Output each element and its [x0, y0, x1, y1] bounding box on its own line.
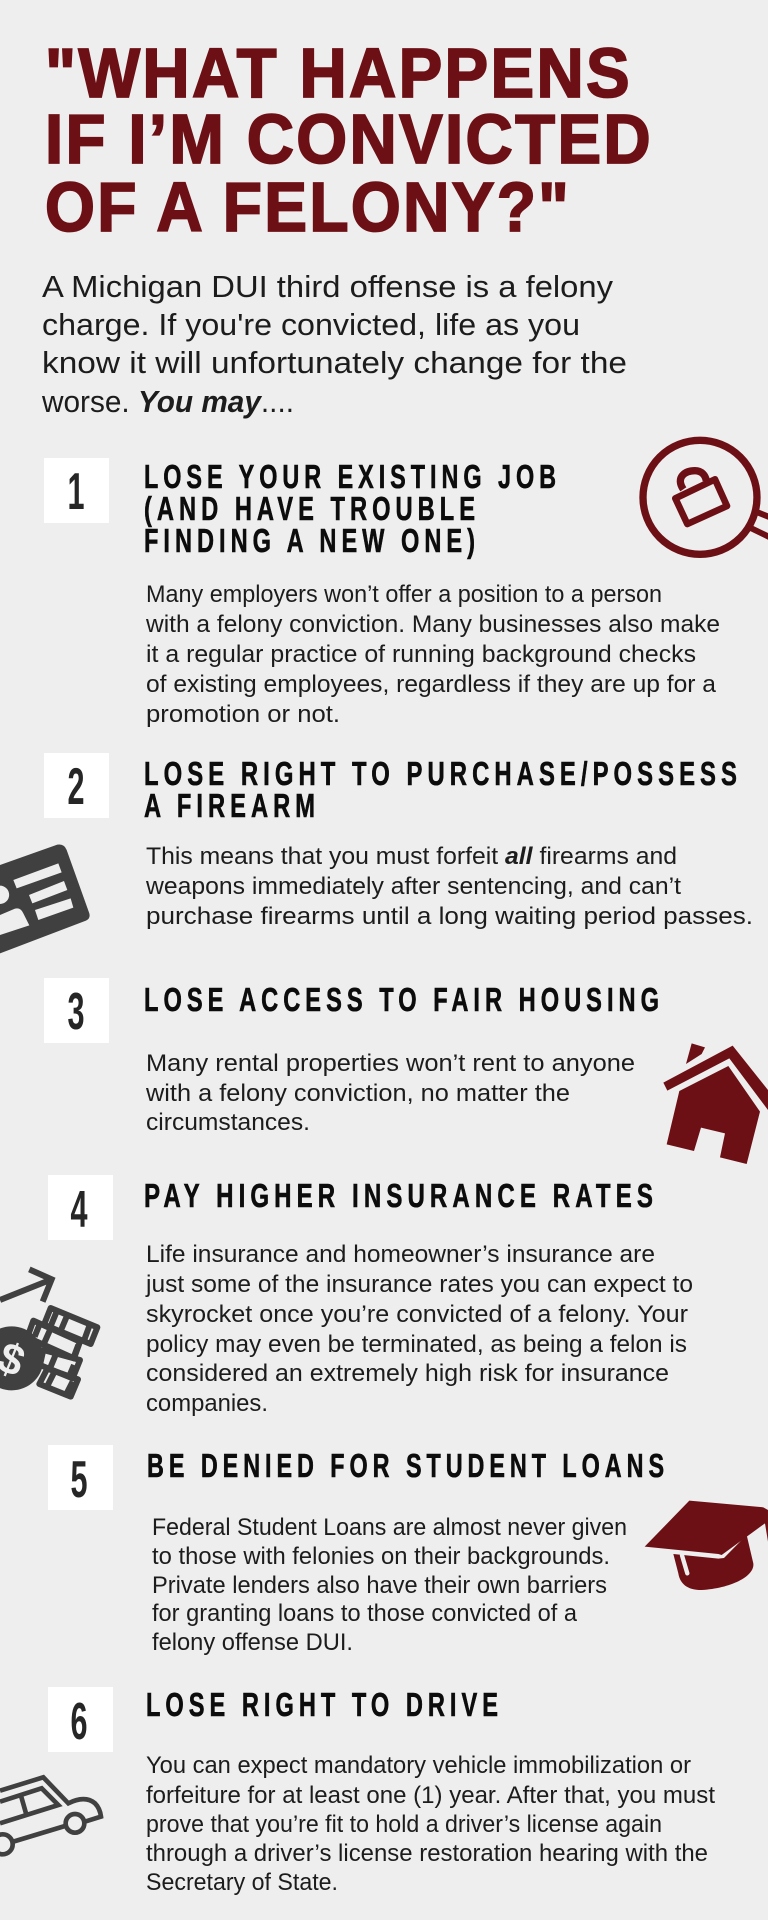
body text 5: to those with felonies on their backgrounds.	[152, 1543, 610, 1570]
body text 2: This means that you must forfeit all firearms and	[146, 843, 677, 870]
number badge 6	[48, 1687, 113, 1752]
body text 6: Secretary of State.	[146, 1869, 338, 1896]
body text 6: through a driver’s license restoration hearing with the	[146, 1840, 708, 1867]
intro text: charge. If you're convicted, life as you	[42, 307, 580, 342]
body text 1: it a regular practice of running background checks	[146, 641, 696, 668]
body text 4: policy may even be terminated, as being a felon is	[146, 1331, 687, 1358]
number badge 6: 6	[70, 1693, 88, 1751]
body text 1: Many employers won’t offer a position to a person	[146, 581, 662, 608]
body text 6	[146, 1752, 715, 1896]
title: OF A FELONY?"	[45, 168, 571, 246]
icon: id card	[0, 844, 90, 953]
body text 3: with a felony conviction, no matter the	[145, 1080, 570, 1107]
body text 5: for granting loans to those convicted of a	[152, 1600, 577, 1627]
number badge 3: 3	[68, 983, 84, 1041]
icon: magnifier with briefcase	[643, 440, 768, 554]
body text 6: You can expect mandatory vehicle immobilization or	[146, 1752, 691, 1779]
number badge 5	[48, 1445, 113, 1510]
number badge 2: 2	[68, 758, 84, 816]
icon: house	[663, 1043, 768, 1164]
heading 6: LOSE RIGHT TO DRIVE	[146, 1686, 503, 1723]
title	[45, 34, 653, 246]
body text 5: Federal Student Loans are almost never given	[152, 1514, 627, 1541]
panel: item 5 student loans	[48, 1445, 768, 1656]
number badge 5: 5	[70, 1451, 88, 1509]
body text 6: prove that you’re fit to hold a driver’s license again	[146, 1811, 662, 1838]
panel: item 3 housing	[44, 978, 768, 1164]
body text 1: of existing employees, regardless if they are up for a	[146, 671, 716, 698]
body text 4: Life insurance and homeowner’s insurance are	[146, 1241, 655, 1268]
panel: item 6 driving	[0, 1686, 715, 1896]
number badge 3	[44, 978, 109, 1043]
body text 4: companies.	[146, 1390, 268, 1417]
heading 2	[144, 755, 742, 824]
intro text	[41, 269, 627, 419]
body text 3	[145, 1050, 635, 1136]
body text 2	[145, 843, 753, 930]
heading 1	[144, 458, 561, 559]
body text 5: felony offense DUI.	[152, 1629, 353, 1656]
body text 1	[145, 581, 720, 728]
panel: item 4 insurance	[0, 1175, 693, 1417]
body text 5	[152, 1514, 627, 1656]
heading 1: FINDING A NEW ONE)	[144, 522, 480, 559]
icon: money and rising arrow	[0, 1269, 97, 1397]
number badge 4	[48, 1175, 113, 1240]
number badge 1: 1	[68, 463, 84, 521]
panel: item 2 firearm	[0, 753, 753, 953]
intro text: know it will unfortunately change for the	[42, 345, 627, 380]
intro text: A Michigan DUI third offense is a felony	[42, 269, 614, 304]
body text 5: Private lenders also have their own barriers	[152, 1572, 607, 1599]
number badge 2	[44, 753, 109, 818]
body text 1: promotion or not.	[146, 701, 340, 728]
body text 4: skyrocket once you’re convicted of a felony. Your	[146, 1301, 688, 1328]
body text 4: considered an extremely high risk for insurance	[146, 1360, 669, 1387]
title: "WHAT HAPPENS	[45, 34, 632, 112]
icon: graduation cap	[645, 1501, 768, 1590]
body text 3: circumstances.	[146, 1109, 310, 1136]
heading 2: A FIREARM	[144, 787, 320, 824]
number badge 1	[44, 458, 109, 523]
body text 2: purchase firearms until a long waiting period passes.	[146, 903, 753, 930]
title: IF I’M CONVICTED	[45, 100, 653, 178]
heading 1: LOSE YOUR EXISTING JOB	[144, 458, 561, 495]
body text 3: Many rental properties won’t rent to anyone	[146, 1050, 635, 1077]
icon: car	[0, 1777, 101, 1854]
body text 2: weapons immediately after sentencing, and can’t	[145, 873, 681, 900]
intro text: worse. You may....	[41, 384, 294, 419]
number badge 4: 4	[70, 1181, 88, 1239]
body text 1: with a felony conviction. Many businesses also make	[145, 611, 720, 638]
body text 6: forfeiture for at least one (1) year. After that, you must	[146, 1782, 715, 1809]
body text 4: just some of the insurance rates you can expect to	[145, 1271, 693, 1298]
panel: item 1 job	[44, 440, 768, 728]
body text 4	[145, 1241, 693, 1417]
heading 1: (AND HAVE TROUBLE	[144, 490, 480, 527]
